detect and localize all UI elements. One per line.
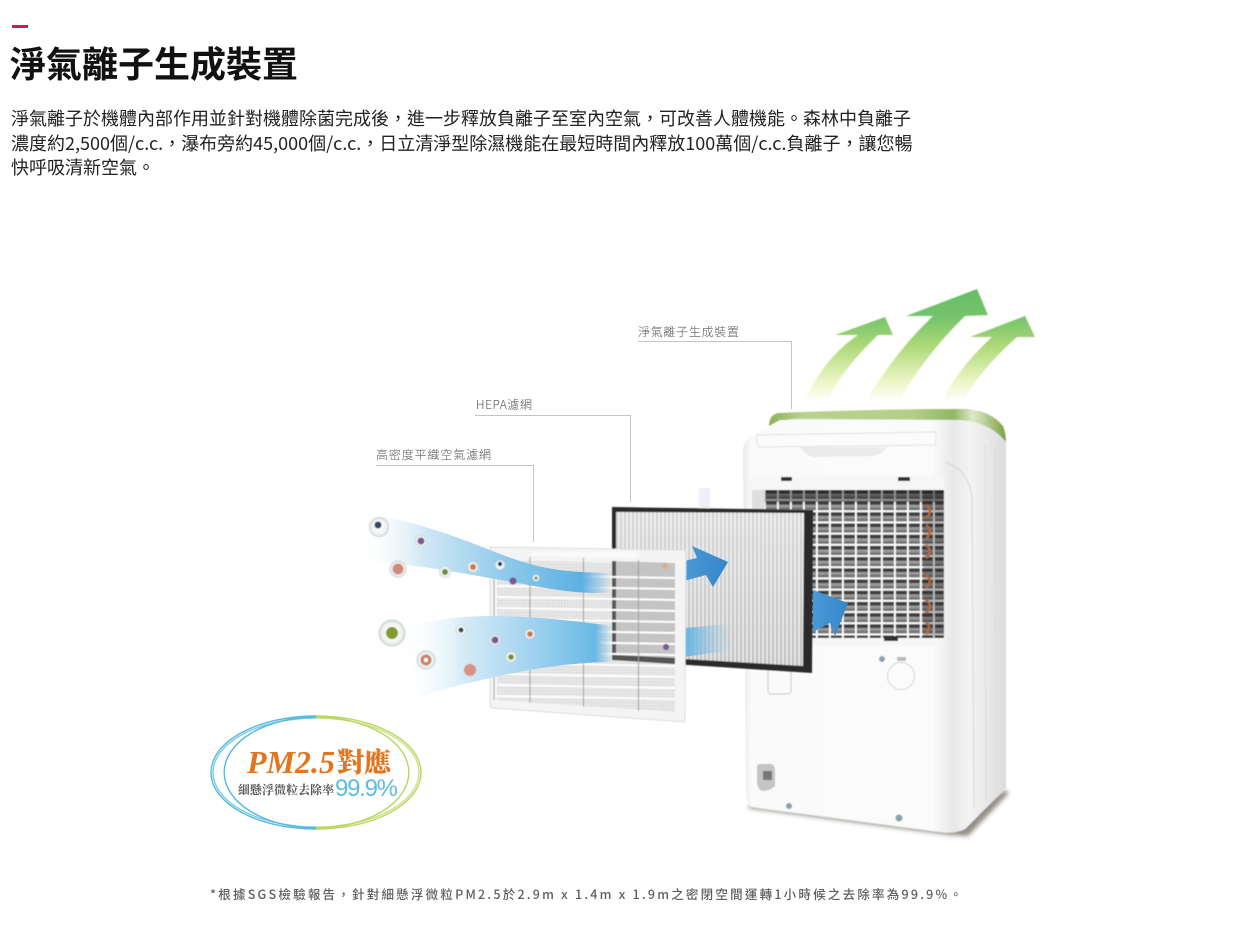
- drain tab: [768, 668, 791, 694]
- clips: [781, 477, 792, 481]
- badge rings: [211, 716, 421, 829]
- dehumidifier unit: [743, 409, 1009, 836]
- power inlet: [757, 764, 775, 791]
- top handle recess: [757, 432, 936, 457]
- HEPA seen through the filter: [612, 561, 675, 664]
- badge figure: 99.9%: [335, 775, 398, 802]
- float knob: [879, 656, 914, 690]
- blue air band upper: [358, 512, 612, 593]
- particles: [369, 517, 669, 676]
- label: flat-weave air filter with leader line: 高密度平織空氣濾網: [376, 446, 491, 463]
- side panel lines: [945, 445, 996, 808]
- rear grille: [752, 490, 944, 638]
- label: ionizer with leader line: [638, 323, 792, 409]
- description text: 快呼吸清新空氣。: [11, 154, 155, 180]
- accent dash: [12, 25, 28, 28]
- badge heading: 對應: [337, 741, 394, 780]
- blue air band lower: [400, 616, 612, 698]
- badge: PM2.5 99.9%: [211, 716, 421, 829]
- badge heading: PM2.5: [246, 744, 335, 780]
- blue airflow arrow on HEPA: [684, 546, 728, 587]
- unit body: [743, 419, 1006, 833]
- screws: [786, 803, 792, 809]
- label: ionizer with leader line: 淨氣離子生成裝置: [638, 323, 739, 340]
- blue airflow arrow behind HEPA: [813, 590, 848, 636]
- rear grille housing: [751, 476, 944, 646]
- flat-weave air filter: [490, 547, 686, 722]
- HEPA filter: [612, 488, 813, 673]
- label: HEPA filter with leader line: [475, 396, 630, 502]
- label: flat-weave air filter with leader line: [376, 446, 534, 542]
- description text: 濃度約2,500個/c.c.，瀑布旁約45,000個/c.c.，日立清淨型除濕機能在最短時間內釋放100萬個/c.c.負離子，讓您暢: [11, 130, 912, 156]
- footnote: *根據SGS檢驗報告，針對細懸浮微粒PM2.5於2.9m x 1.4m x 1.9m之密閉空間運轉1小時候之去除率為99.9%。: [210, 884, 962, 903]
- unit shadow: [748, 790, 1009, 836]
- description text: [11, 105, 912, 180]
- badge heading: [246, 741, 394, 780]
- description text: 淨氣離子於機體內部作用並針對機體除菌完成後，進一步釋放負離子至室內空氣，可改善人體機能。森林中負離子: [11, 105, 911, 131]
- green top strip: [769, 409, 1006, 442]
- label: HEPA filter with leader line: HEPA濾網: [476, 396, 532, 413]
- blue air band exit: [684, 624, 732, 657]
- icon: three green airflow arrows: [805, 289, 1035, 400]
- badge caption: 細懸浮微粒去除率: [238, 781, 334, 798]
- title: 淨氣離子生成裝置: [10, 36, 298, 88]
